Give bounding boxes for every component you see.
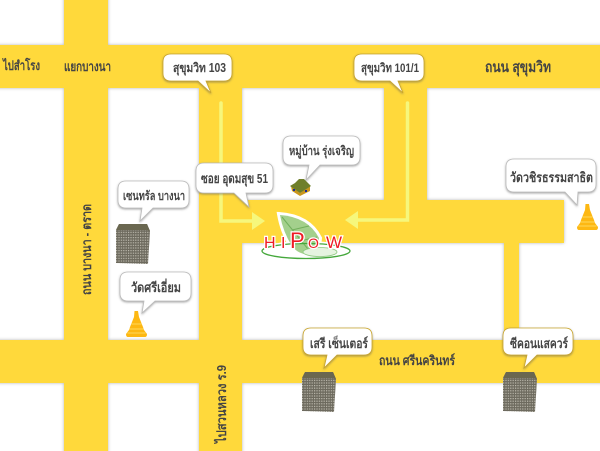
building: Central Bang Na	[116, 224, 150, 264]
callout: Sukhumvit 101/1: สุขุมวิท 101/1	[361, 61, 419, 76]
logo: HIPOW: I	[281, 235, 285, 252]
icon: house	[290, 179, 311, 196]
callout: Central Bang Na: เซนทรัล บางนา	[123, 189, 185, 203]
callout: Seri Center	[303, 328, 372, 368]
callout: Sukhumvit 103	[163, 54, 232, 93]
icon: stupa Wat Vachira	[577, 204, 598, 230]
callout: Wat Sri Iam	[120, 272, 191, 313]
logo: HIPOW: W	[326, 233, 342, 252]
road label: Srinakarin: ถนน ศรีนครินทร์	[379, 353, 455, 368]
road label: Samrong: ไปสำโรง	[2, 57, 40, 73]
callout: Seacon Square: ซีคอนแสควร์	[510, 336, 568, 351]
callout: Central Bang Na	[118, 181, 189, 221]
road label: to Suan Luang R.9: ไปสวนหลวง ร.9	[213, 365, 229, 445]
logo: HIPOW: P	[290, 228, 305, 253]
building: Seacon Square	[503, 372, 537, 412]
callout: Wat Vachira Thammasathit	[506, 159, 596, 205]
logo: HIPOW	[260, 214, 352, 261]
callout: Rung Charoen village	[283, 136, 360, 180]
icon: stupa Wat Sri Iam	[126, 311, 147, 337]
road label: Bang Na junction: แยกบางนา	[64, 59, 111, 74]
callout: Soi Udomsuk 51	[196, 163, 273, 207]
road label: Sukhumvit: ถนน สุขุมวิท	[485, 58, 551, 77]
callout: Rung Charoen village: หมู่บ้าน รุ่งเจริญ	[289, 144, 354, 159]
callout: Seri Center: เสรี เซ็นเตอร์	[310, 334, 368, 351]
arrow: from Sukhumvit 101/1	[345, 103, 408, 229]
callout: Sukhumvit 101/1	[354, 54, 424, 93]
building: Seri Center	[302, 372, 336, 412]
logo: HIPOW: O	[308, 235, 319, 251]
road label: Bang Na - Trat: ถนน บางนา - ตราด	[79, 204, 94, 295]
arrow: from Sukhumvit 103	[221, 103, 265, 230]
callout: Seacon Square	[503, 328, 573, 368]
callout: Wat Sri Iam: วัดศรีเอี่ยม	[131, 278, 181, 295]
callout: Soi Udomsuk 51: ซอย อุดมสุข 51	[201, 171, 268, 187]
logo: HIPOW: H	[264, 235, 276, 252]
callout: Sukhumvit 103: สุขุมวิท 103	[173, 61, 226, 76]
